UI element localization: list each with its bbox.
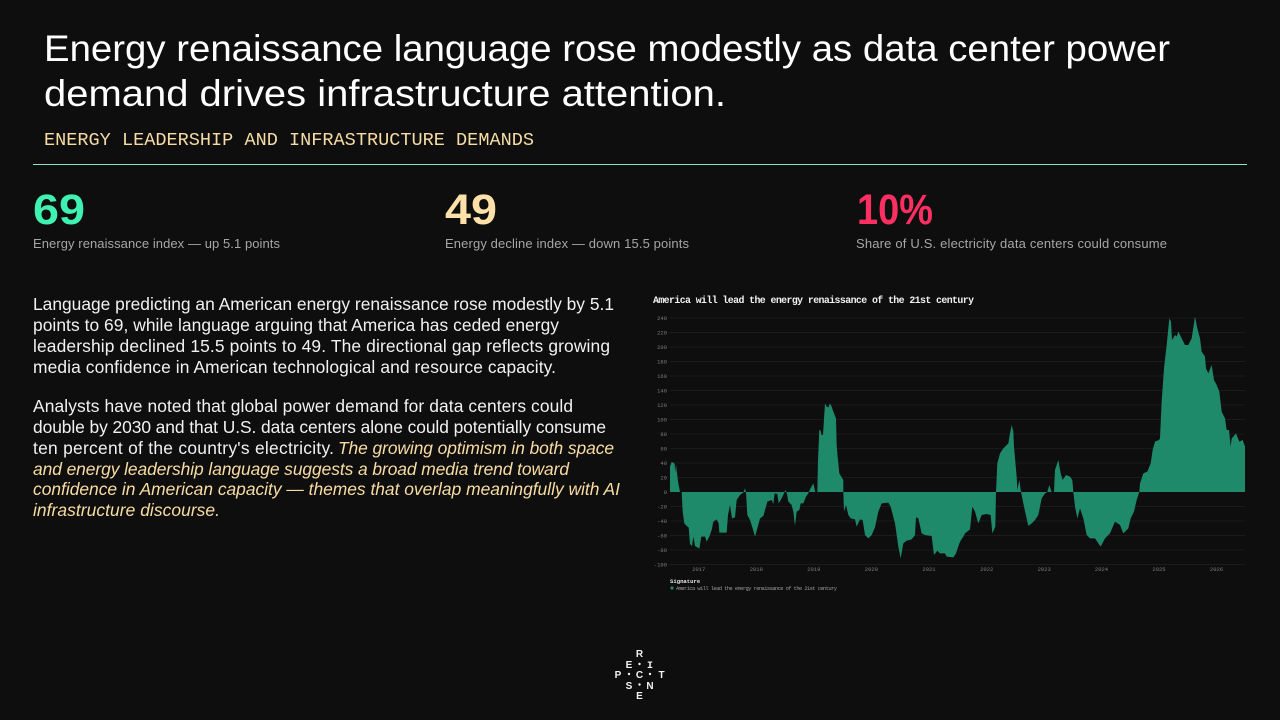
x axis labels: 2023 <box>1038 566 1051 573</box>
area chart <box>653 295 1245 592</box>
x axis labels: 2021 <box>922 566 936 573</box>
subtitle: ENERGY LEADERSHIP AND INFRASTRUCTURE DEMANDS <box>44 130 534 151</box>
y axis labels: 0 <box>664 489 667 496</box>
y axis labels: 40 <box>660 460 667 467</box>
logo: T <box>658 670 665 681</box>
x axis labels: 2024 <box>1095 566 1109 573</box>
y axis labels: 20 <box>660 474 667 482</box>
x axis labels: 2018 <box>750 566 763 573</box>
paragraph: analysts and data centers: infrastructure discourse. <box>33 500 220 520</box>
y axis labels: -60 <box>657 532 667 540</box>
logo: R <box>636 649 644 660</box>
paragraph: analysts and data centers: The growing optimism in both space <box>338 438 614 458</box>
stat: share of electricity: Share of U.S. electricity data centers could consume <box>856 236 1167 251</box>
stat: energy renaissance index <box>33 186 280 251</box>
logo: N <box>646 681 654 692</box>
logo: P <box>615 670 622 681</box>
title <box>44 28 1170 114</box>
paragraph: analysts and data centers: double by 2030 and that U.S. data centers alone could potentially consume <box>33 417 606 437</box>
y axis labels: 220 <box>657 330 667 336</box>
x axis labels: 2017 <box>692 566 705 573</box>
y axis labels: 120 <box>657 402 667 409</box>
y axis labels: 60 <box>660 446 667 452</box>
logo: E <box>626 660 633 671</box>
y axis labels: 180 <box>657 358 667 366</box>
logo: E <box>636 691 643 702</box>
paragraph: language shift: points to 69, while language arguing that America has ceded energy <box>33 315 559 335</box>
title: Energy renaissance language rose modestly as data center power <box>44 28 1170 69</box>
paragraph: analysts and data centers: confidence in American capacity — themes that overlap meaningfully with AI <box>33 479 620 499</box>
paragraph: analysts and data centers: Analysts have noted that global power demand for data centers could <box>33 396 573 416</box>
x axis labels: 2019 <box>807 566 820 573</box>
x axis labels: 2025 <box>1152 566 1166 573</box>
y axis labels: -80 <box>657 547 667 554</box>
y axis labels: 160 <box>657 373 667 380</box>
y axis labels: -40 <box>657 518 667 525</box>
paragraph: analysts and data centers: ten percent of the country's electricity. <box>33 438 334 458</box>
x axis labels <box>692 566 1223 573</box>
legend: Signature <box>670 578 701 585</box>
x axis labels: 2020 <box>865 566 878 573</box>
stat: energy decline index <box>445 186 690 251</box>
y axis labels: -20 <box>657 504 667 510</box>
stat: share of electricity: 10% <box>857 186 933 234</box>
y axis labels: 140 <box>657 388 667 394</box>
chart title: America will lead the energy renaissance of the 21st century <box>653 295 974 306</box>
stat: share of electricity <box>856 186 1167 251</box>
x axis labels: 2022 <box>980 566 993 573</box>
y axis labels: -100 <box>654 562 667 568</box>
paragraph: language shift <box>33 294 614 377</box>
paragraph: analysts and data centers <box>33 396 620 520</box>
y axis labels: 100 <box>657 416 667 424</box>
y axis labels: 240 <box>657 315 667 322</box>
x axis labels: 2026 <box>1210 566 1223 573</box>
y axis labels: 200 <box>657 344 667 351</box>
y axis labels: 80 <box>660 431 667 438</box>
stat: energy decline index: 49 <box>445 186 497 234</box>
y axis labels <box>654 315 667 568</box>
logo: S <box>626 681 633 692</box>
legend <box>670 578 838 592</box>
logo: C <box>636 670 643 681</box>
logo <box>615 649 665 702</box>
stat: energy renaissance index: Energy renaissance index — up 5.1 points <box>33 236 280 251</box>
stat: energy renaissance index: 69 <box>33 186 85 234</box>
signature area series <box>670 317 1245 558</box>
logo: I <box>647 661 653 672</box>
paragraph: language shift: Language predicting an American energy renaissance rose modestly by 5.1 <box>33 294 614 314</box>
paragraph: analysts and data centers: and energy leadership language suggests a broad media trend toward <box>33 459 570 479</box>
paragraph: language shift: media confidence in American technological and resource capacity. <box>33 357 556 377</box>
stat: energy decline index: Energy decline index — down 15.5 points <box>445 236 690 251</box>
title: demand drives infrastructure attention. <box>44 73 726 114</box>
paragraph: language shift: leadership declined 15.5 points to 49. The directional gap reflects growing <box>33 336 610 356</box>
legend: America will lead the energy renaissance of the 21st century <box>676 586 838 592</box>
